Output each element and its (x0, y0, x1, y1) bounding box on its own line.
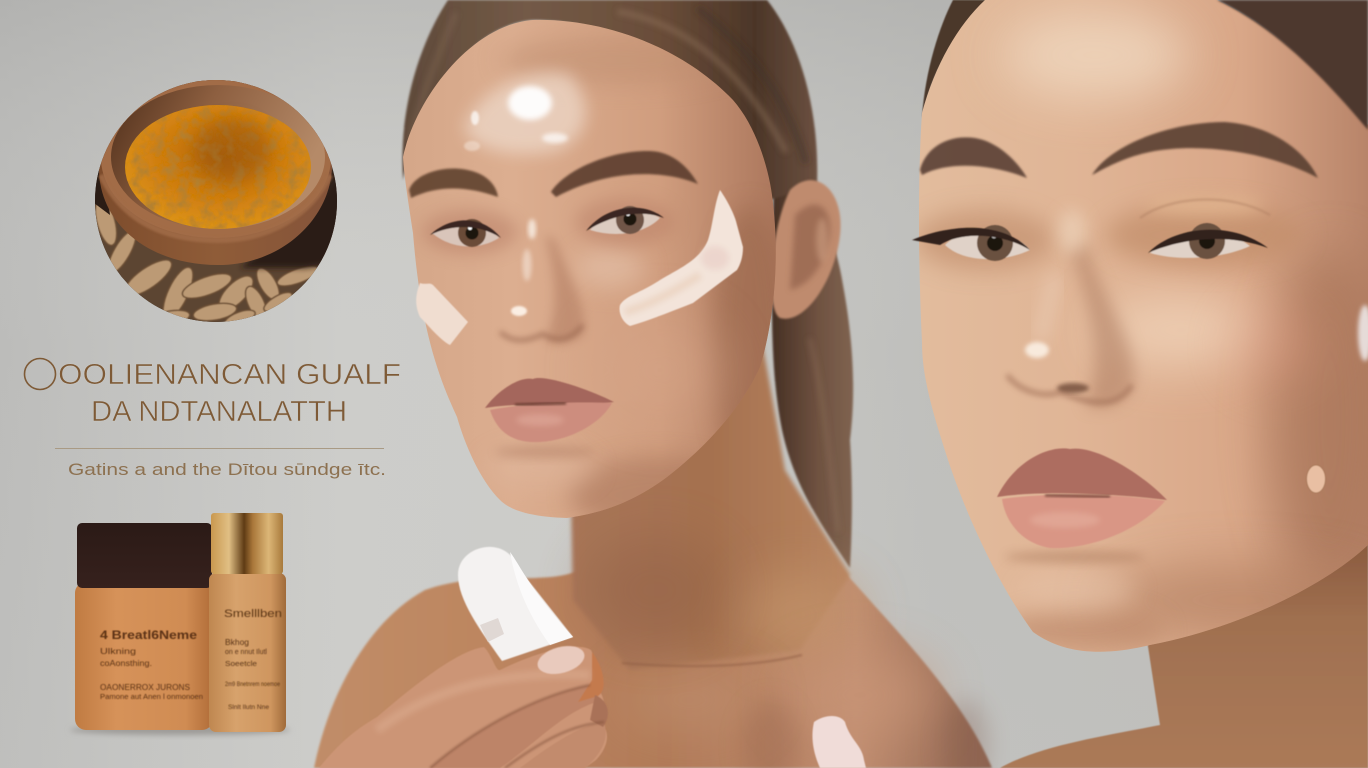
woman: centre figure (314, 0, 992, 768)
bottle label: on e nnut Ilutl (225, 647, 267, 656)
jar label: Pamone aut Anen l onmonoen (100, 692, 203, 701)
forehead cream (464, 73, 586, 154)
lips (485, 378, 614, 442)
nose (1007, 210, 1134, 408)
hair, right side (1217, 0, 1368, 130)
right eyebrow (1092, 122, 1318, 178)
bottle cap (211, 513, 283, 574)
oat flakes (95, 204, 337, 322)
face shading (707, 208, 775, 431)
jar label (100, 628, 203, 701)
jar label: OAONERROX JURONS (100, 683, 190, 692)
thumbnail (534, 641, 588, 679)
applicator (458, 547, 573, 661)
bottle label: 2m9 Bnetnrem noemoe (225, 681, 280, 688)
cream swipe on right cheek (619, 190, 743, 326)
cream on shoulder (812, 716, 866, 768)
heading line 1: OOLIENANCAN GUALF (58, 359, 401, 391)
face (395, 10, 788, 533)
bottle body (209, 573, 286, 732)
face shading (1000, 10, 1190, 100)
bottle label: Bkhog (225, 638, 249, 647)
neck (571, 330, 850, 670)
heading line 2: DA NDTANALATTH (91, 396, 347, 428)
jar label: Ulkning (100, 646, 136, 656)
cream at edge (1358, 305, 1368, 361)
bottle label: Smelllben (224, 608, 282, 620)
jar body (75, 582, 213, 730)
left eye (430, 219, 501, 247)
subtitle: Gatins a and the Dītou sūndge ītc. (68, 460, 386, 479)
body light and shade (585, 535, 987, 768)
wooden bowl (99, 78, 332, 265)
image: turmeric bowl and oats circle (90, 75, 345, 330)
jar label: 4 Breatl6Neme (100, 628, 197, 642)
bottle label: Slnlt Ilutn Nne (228, 705, 270, 711)
left eye (912, 225, 1030, 261)
jar label: coAonsthing. (100, 658, 152, 668)
cream swipe on left cheek (416, 283, 468, 345)
woman: right close-up (912, 0, 1368, 768)
right eyebrow (551, 151, 698, 197)
turmeric powder (125, 105, 311, 229)
hand with applicator (319, 547, 608, 768)
heading (24, 358, 401, 428)
bottle label: Soeetcle (225, 659, 257, 668)
right eye (586, 206, 664, 234)
hand (319, 647, 608, 768)
left eyebrow (409, 168, 498, 198)
face (915, 0, 1368, 660)
ponytail (772, 150, 853, 568)
product: jar (70, 523, 290, 735)
hair (402, 0, 817, 200)
nose (500, 219, 584, 344)
bottle label (224, 608, 282, 711)
dark shadow right of bowl (240, 175, 337, 272)
left eyebrow (920, 137, 1027, 178)
hair streaks (410, 10, 838, 530)
right eye (1148, 223, 1268, 259)
cream droplet (1306, 465, 1326, 493)
shoulders and chest (314, 555, 992, 768)
lips (997, 448, 1167, 548)
product: bottle (209, 513, 286, 732)
neck and shoulder (1000, 500, 1368, 768)
hair, left side (922, 0, 990, 118)
eyelid crease right (1140, 200, 1270, 218)
ear (771, 180, 841, 319)
jar lid (77, 523, 212, 588)
heading ornament ring (24, 358, 56, 390)
